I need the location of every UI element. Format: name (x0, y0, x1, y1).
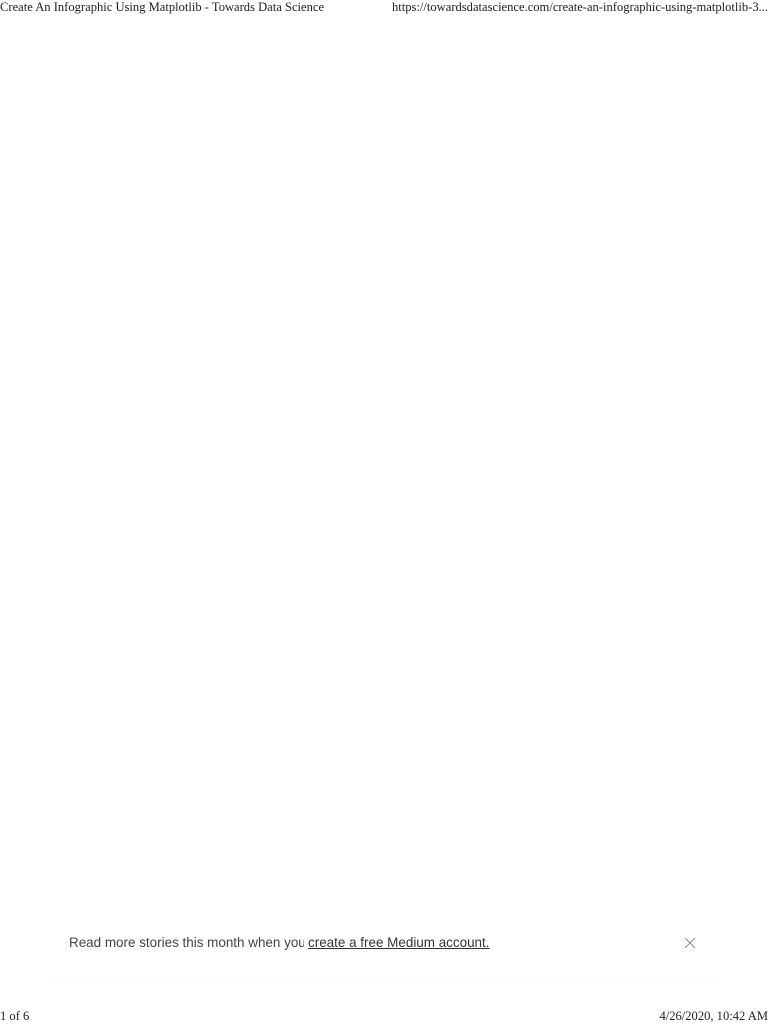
banner text: Read more stories this month when you (69, 935, 304, 950)
banner link: create a free Medium account. (308, 935, 490, 950)
banner: free account prompt (48, 925, 720, 980)
page URL header: https://towardsdatascience.com/create-an-infographic-using-matplotlib-3... (392, 0, 768, 14)
date and time footer: 4/26/2020, 10:42 AM (659, 1009, 768, 1023)
page title header: Create An Infographic Using Matplotlib - Towards Data Science (0, 0, 324, 14)
page number footer: 1 of 6 (0, 1009, 29, 1023)
icon: close (684, 938, 696, 948)
